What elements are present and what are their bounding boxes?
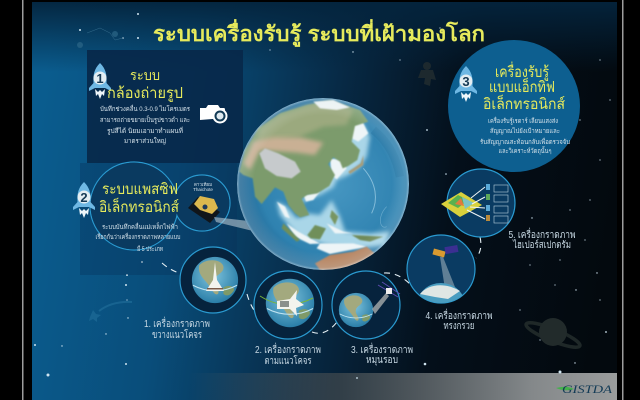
rocket 3: 3: [462, 74, 470, 89]
panel 3 heading: [483, 61, 565, 113]
rocket 2: [73, 182, 95, 218]
panel 1 heading: ระบบ: [130, 67, 160, 83]
panel 2 text: มี 5 ประเภท: [137, 245, 163, 253]
dashed connectors between scanner circles: [162, 237, 481, 333]
panel 1 heading: [107, 67, 183, 102]
label 3: 3. เครื่องราดภาพ: [351, 342, 413, 356]
scanner 5: hyperspectral: [441, 169, 515, 237]
circle outlines: [90, 162, 230, 250]
logo: GISTDA: GISTDA: [562, 382, 613, 396]
icon: camera: [200, 105, 228, 124]
label 4: 4. เครื่องกราดภาพ: [426, 308, 492, 322]
saturn: [524, 318, 582, 351]
rocket 1: [89, 63, 111, 99]
label 3: [351, 342, 413, 366]
Japan: [348, 155, 363, 174]
panel 3: active electronic: [448, 40, 580, 172]
panel 1: camera system: [87, 50, 243, 163]
panel 3 text: สัญญาณไปยังเป้าหมายและ: [490, 127, 560, 135]
panel 1 text: รูปสีได้ นิยมเอามาทำแผนที่: [107, 126, 183, 135]
panel 1 text: มาตราส่วนใหญ่: [124, 137, 166, 145]
panel 3 heading: แบบแอ็กทิฟ: [489, 77, 555, 96]
beam from satellite to earth: [214, 217, 257, 232]
terrain block: [441, 192, 482, 217]
land: tan belt: [243, 137, 323, 170]
panel 2 text: เรียกกันว่าเครื่องกราดภาพหลายแบบ: [96, 232, 180, 241]
panel 3 text: รับสัญญาณสะท้อนกลับเพื่อตรวจจับ: [480, 137, 570, 146]
title: ระบบเครื่องรับรู้ ระบบที่เฝ้ามองโลก: [153, 18, 485, 48]
panel 2 text: ระบบบันทึกคลื่นแม่เหล็กไฟฟ้า: [102, 222, 178, 231]
satellite: Thaichote: [193, 187, 213, 192]
shooting star: [89, 302, 132, 322]
astronaut silhouette: [418, 62, 436, 86]
land: north tint: [256, 100, 353, 142]
scanner 3: spin: [332, 271, 400, 339]
label 5: ไฮเปอร์สเปกตรัม: [512, 239, 571, 251]
scanner 4: conical: [406, 234, 476, 304]
Australia: [315, 247, 377, 270]
land: Asia: [239, 101, 368, 217]
label 1: [144, 316, 210, 341]
plateau: [259, 148, 301, 178]
label 1: ขวางแนวโคจร: [152, 328, 202, 341]
ocean streaks: [363, 168, 375, 213]
label 4: ทรงกรวย: [444, 321, 474, 332]
rocket 1: 1: [96, 71, 104, 86]
panel 3 text: [480, 116, 570, 155]
panel 3 text: และวิเคราะห์วัตถุนั้นๆ: [498, 146, 552, 155]
satellite: ดาวเทียม: [194, 182, 212, 187]
panel 1 text: สามารถถ่ายขยายเป็นรูปขาวดำ และ: [100, 115, 190, 124]
panel 3 heading: อิเล็กทรอนิกส์: [483, 94, 565, 113]
panel 1 heading: กล้องถ่ายรูป: [107, 85, 183, 102]
earth globe: [237, 98, 409, 270]
label 2: 2. เครื่องกราดภาพ: [255, 342, 321, 356]
label 3: หมุนรอบ: [366, 355, 398, 366]
shallow shelf: [277, 122, 390, 248]
scanner 2: along-track: [254, 271, 322, 339]
rocket 2: 2: [80, 190, 88, 205]
label 5: 5. เครื่องกราดภาพ: [508, 227, 576, 241]
panel 1 text: บันทึกช่วงคลื่น 0.3-0.9 ไมโครเมตร: [100, 104, 190, 113]
panel 1 text: [100, 104, 190, 145]
scanner 1: across-track: [180, 247, 246, 313]
panel 2: passive electronic: [73, 162, 237, 275]
north snow: [313, 100, 350, 110]
panel 2 heading: อิเล็กทรอนิกส์: [99, 197, 179, 216]
label 5: [508, 227, 576, 251]
panel 2 heading: ระบบแพสซิฟ: [102, 181, 178, 198]
panel 3 text: เครื่องรับรู้เรดาร์ เลียนแสงส่ง: [488, 116, 558, 125]
label 2: [255, 342, 321, 367]
panel 2 heading: [99, 181, 179, 216]
panel 3 heading: เครื่องรับรู้: [495, 61, 549, 81]
panel 2 text: [96, 222, 180, 253]
white coasts: [277, 120, 368, 254]
label 1: 1. เครื่องกราดภาพ: [144, 316, 210, 330]
satellite: [188, 182, 220, 223]
Borneo / islands: [307, 225, 326, 239]
label 4: [426, 308, 492, 332]
label 2: ตามแนวโคจร: [264, 354, 312, 367]
